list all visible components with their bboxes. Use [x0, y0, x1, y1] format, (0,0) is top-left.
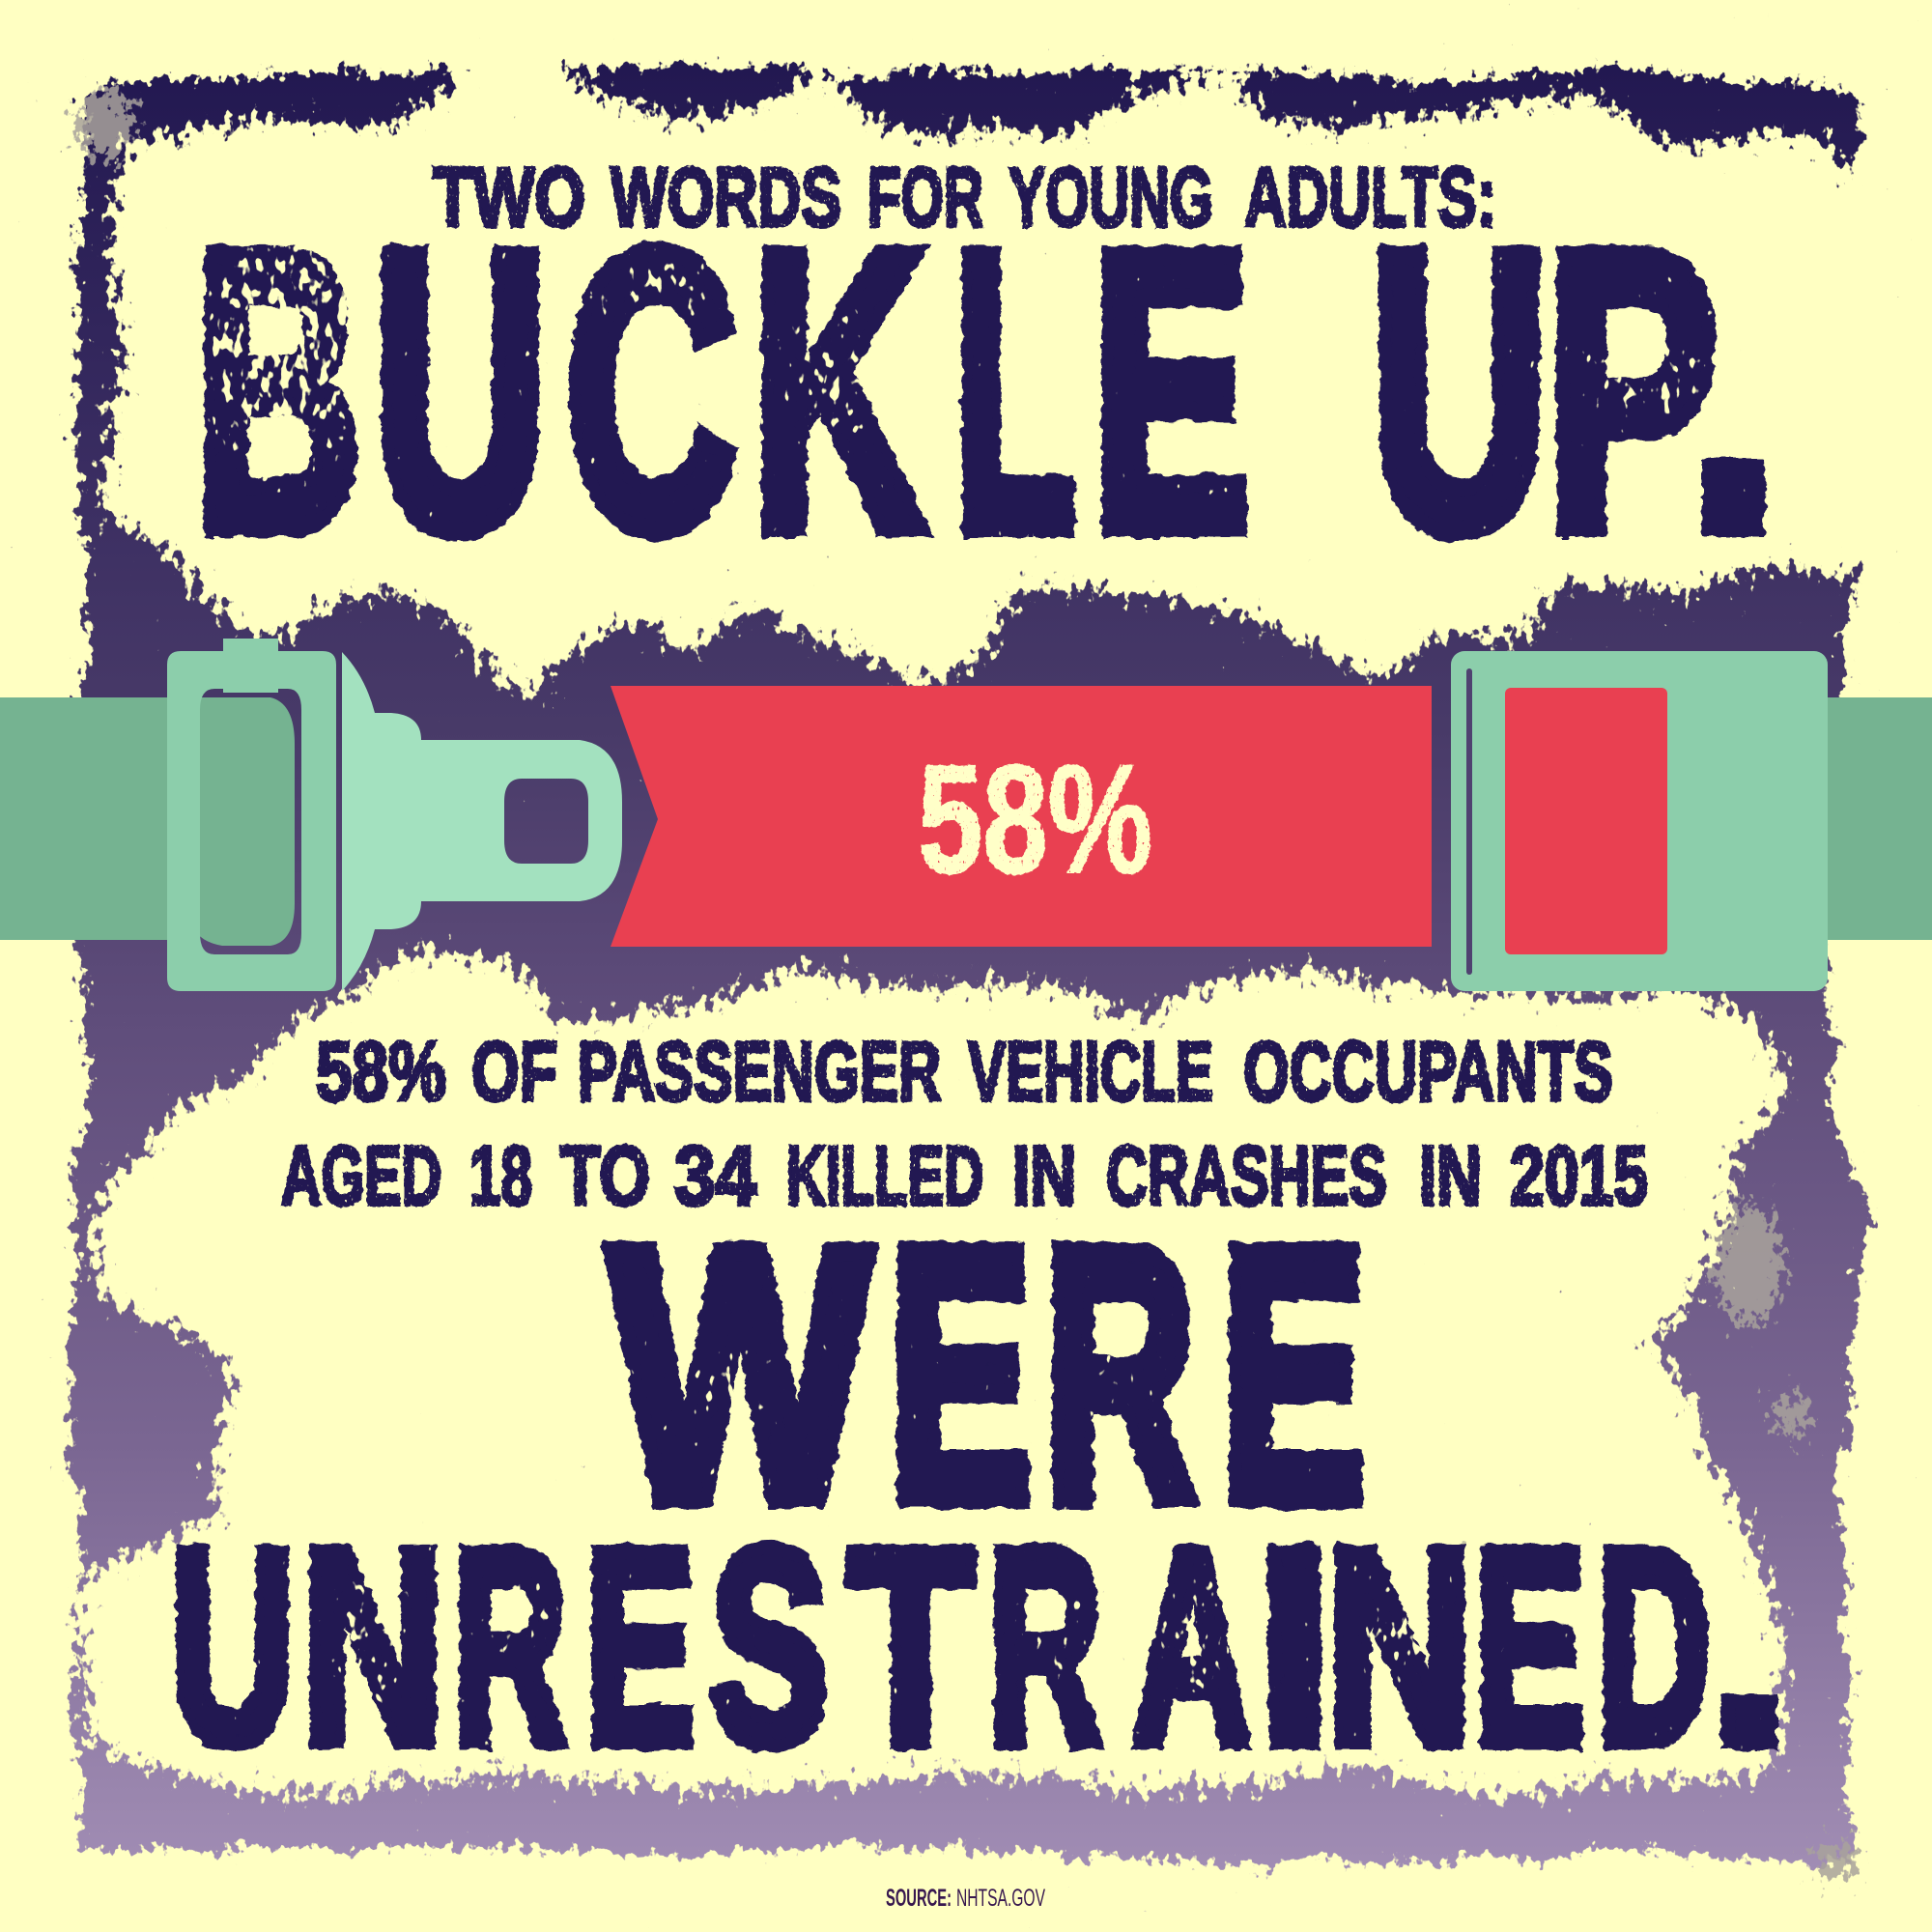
statement line one: PASSENGER: [578, 1025, 941, 1119]
headline: buckle up: E: [1092, 169, 1250, 611]
intro heading: ADULTS:: [1244, 151, 1496, 244]
statement line two: 34: [674, 1129, 756, 1223]
headline: buckle up: C: [565, 169, 737, 611]
distress holes in buckle up: [190, 237, 1715, 488]
headline: unrestrained: .: [1709, 1492, 1790, 1803]
buckle receiver: [1451, 651, 1828, 991]
left strap: [0, 697, 174, 940]
headline: unrestrained: N: [1326, 1492, 1473, 1803]
source note: [886, 1885, 1045, 1912]
headline: buckle up: U: [1370, 169, 1549, 611]
statement line two: KILLED: [786, 1129, 983, 1223]
intro heading: YOUNG: [1009, 151, 1213, 244]
receiver slot: [1466, 668, 1472, 975]
intro heading: TWO: [433, 151, 585, 244]
headline: unrestrained: I: [1258, 1492, 1331, 1803]
headline: unrestrained: U: [170, 1492, 295, 1803]
headline: unrestrained: N: [301, 1492, 444, 1803]
headline: unrestrained: R: [453, 1492, 567, 1803]
statement line one: OF: [471, 1025, 557, 1119]
lower cream area: [76, 950, 1793, 1797]
headline: were: R: [1044, 1174, 1196, 1577]
latch tongue: [342, 652, 622, 991]
source note: SOURCE:: [886, 1885, 952, 1912]
statement line two: IN: [1012, 1129, 1076, 1223]
headline: buckle up: U: [373, 169, 548, 611]
statement line two: IN: [1419, 1129, 1482, 1223]
statement line two: CRASHES: [1106, 1129, 1387, 1223]
headline: unrestrained: S: [710, 1492, 829, 1803]
headline: buckle up: L: [953, 169, 1076, 611]
headline: unrestrained: D: [1597, 1492, 1712, 1803]
headline: were: E: [889, 1174, 1032, 1577]
headline: unrestrained: R: [988, 1492, 1102, 1803]
statement line two: TO: [560, 1129, 650, 1223]
headline: were: E: [1221, 1174, 1366, 1577]
distress holes in lower headlines: [328, 1309, 1444, 1719]
headline: buckle up: .: [1688, 169, 1780, 611]
headline: were: W: [611, 1174, 872, 1577]
red belt percent bar: [611, 686, 1432, 947]
statement line one: 58%: [316, 1025, 446, 1119]
receiver red button: [1505, 688, 1667, 954]
upper cream area: [101, 49, 1897, 698]
right strap: [1821, 697, 1932, 940]
headline: buckle up: B: [195, 169, 361, 611]
source note: NHTSA.GOV: [956, 1885, 1045, 1912]
headline: unrestrained: E: [585, 1492, 696, 1803]
intro heading: FOR: [867, 151, 983, 244]
headline: unrestrained: A: [1132, 1492, 1251, 1803]
seat belt graphic: [0, 639, 1932, 991]
statement line two: 2015: [1510, 1129, 1648, 1223]
headline: unrestrained: T: [847, 1492, 974, 1803]
statement line one: VEHICLE: [968, 1025, 1213, 1119]
statement line one: OCCUPANTS: [1243, 1025, 1613, 1119]
statement line two: AGED: [281, 1129, 441, 1223]
statement line two: 18: [469, 1129, 532, 1223]
strap end in latch window: [164, 697, 295, 946]
headline: unrestrained: E: [1474, 1492, 1585, 1803]
percent value: 58%: [918, 732, 1152, 905]
headline: buckle up: P: [1546, 169, 1719, 611]
headline: buckle up: K: [752, 169, 924, 611]
latch frame: [167, 639, 336, 991]
intro heading: WORDS: [611, 151, 841, 244]
